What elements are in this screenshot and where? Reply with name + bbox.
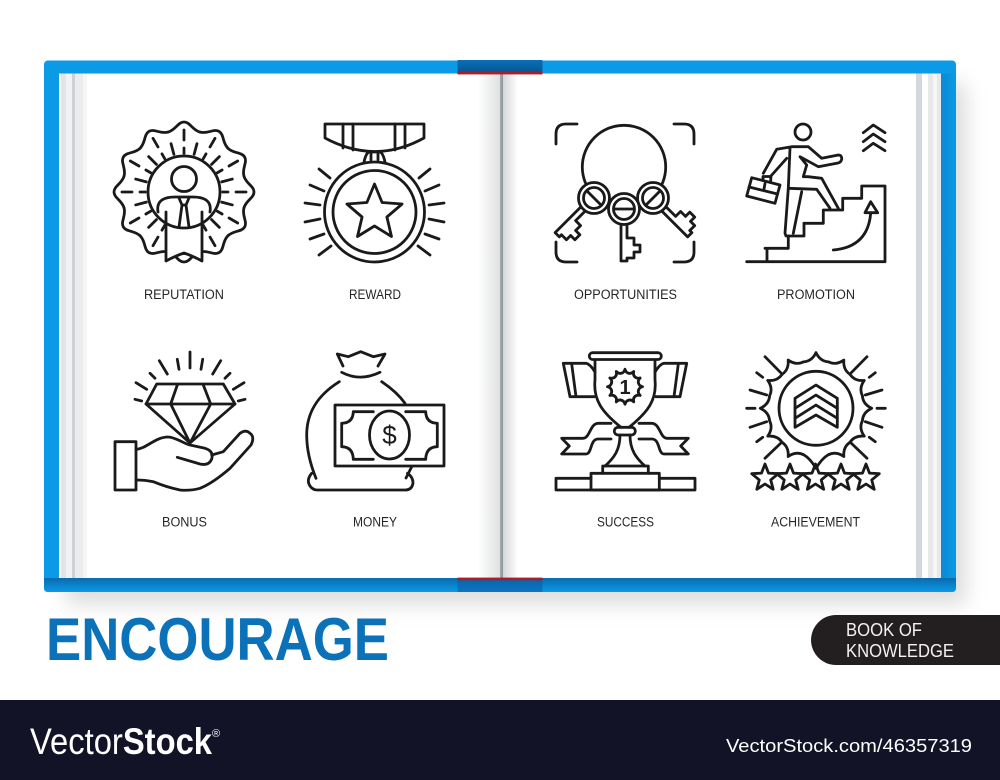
label: opportunities: OPPORTUNITIES bbox=[574, 287, 677, 302]
icon: reward bbox=[305, 124, 444, 262]
rank number: 1 bbox=[619, 377, 631, 399]
label: achievement: ACHIEVEMENT bbox=[771, 514, 860, 530]
icon: money bbox=[307, 352, 444, 490]
icon: bonus bbox=[115, 352, 253, 490]
footer bar bbox=[0, 700, 1000, 780]
footer logo: VectorStock bbox=[30, 721, 212, 762]
book drop shadow bbox=[66, 84, 966, 604]
badge: book of knowledge: KNOWLEDGE bbox=[846, 641, 954, 661]
book gutter shadow bbox=[478, 74, 518, 578]
label: money: MONEY bbox=[353, 514, 397, 530]
label: promotion: PROMOTION bbox=[777, 287, 855, 302]
badge: book of knowledge bbox=[811, 615, 1000, 665]
icon: opportunities keys bbox=[555, 124, 701, 262]
spine top band bbox=[458, 60, 542, 74]
spine bottom band bbox=[458, 578, 542, 592]
label: bonus: BONUS bbox=[162, 514, 207, 530]
icon: reputation bbox=[114, 122, 254, 262]
badge: book of knowledge: BOOK OF bbox=[846, 620, 922, 640]
icon: success trophy bbox=[556, 353, 695, 490]
label: success: SUCCESS bbox=[597, 514, 654, 530]
book pages bbox=[59, 74, 941, 578]
label: reputation: REPUTATION bbox=[144, 287, 224, 302]
book blue cover bbox=[44, 60, 956, 592]
footer image id: VectorStock.com/46357319 bbox=[726, 736, 972, 756]
open book bbox=[44, 60, 956, 592]
footer logo: ® bbox=[212, 728, 220, 740]
dollar sign: $ bbox=[382, 420, 397, 450]
icon: achievement bbox=[747, 353, 885, 489]
icon: promotion bbox=[747, 124, 885, 262]
title: ENCOURAGE bbox=[46, 606, 389, 673]
label: reward: REWARD bbox=[349, 287, 401, 302]
